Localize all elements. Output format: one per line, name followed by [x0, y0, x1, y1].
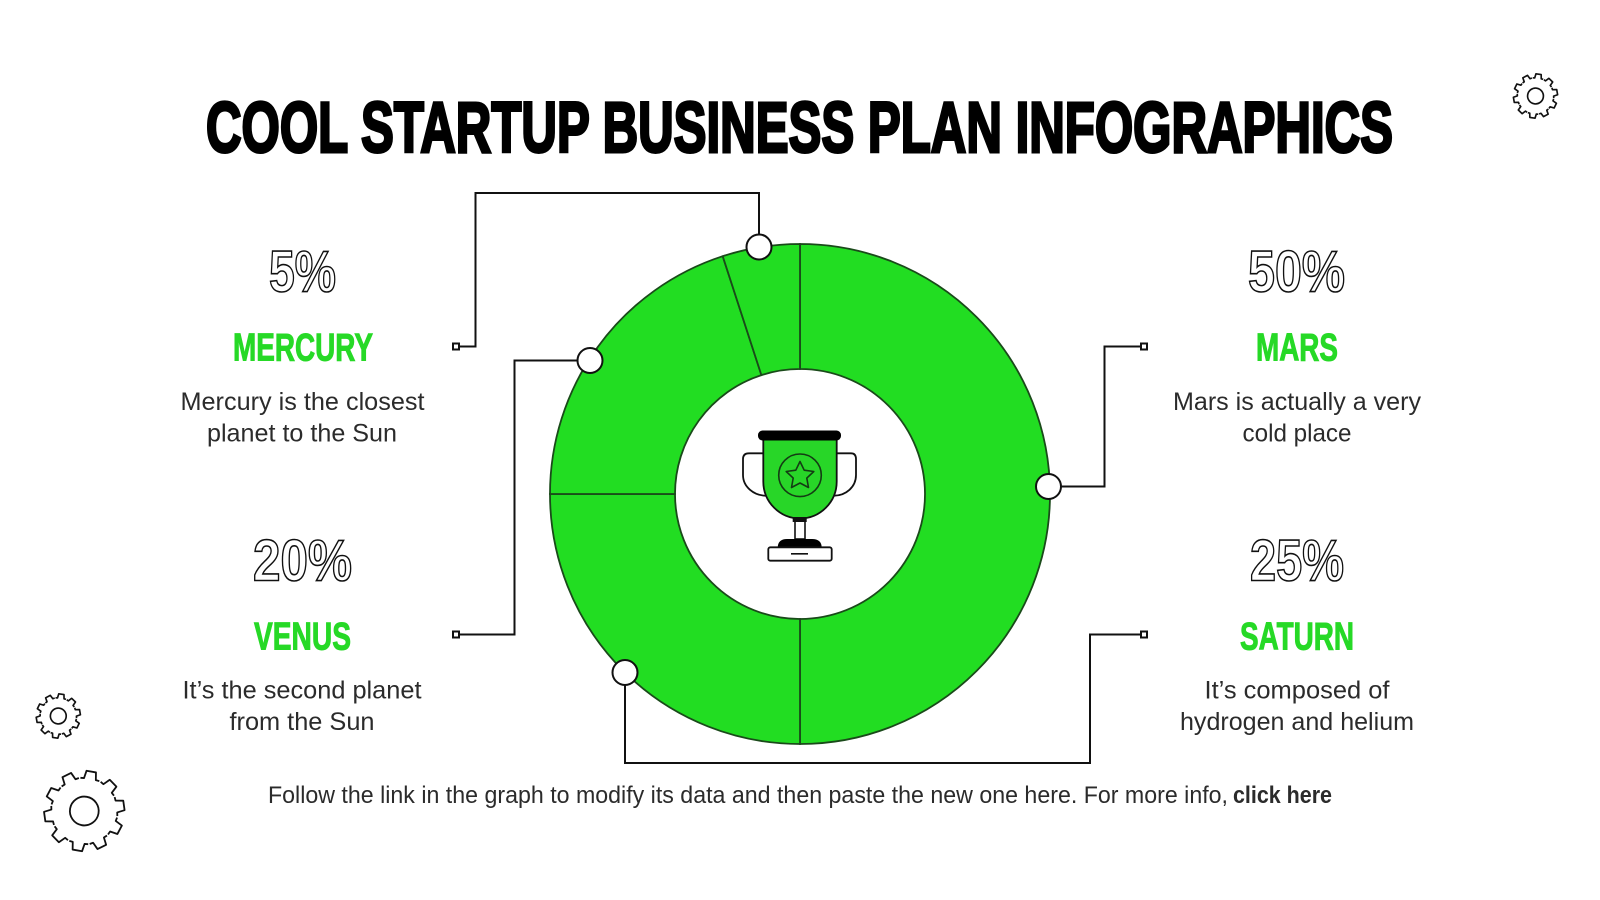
block: Venus: It’s the second planet: [182, 676, 422, 704]
block: Mercury: MERCURY: [233, 326, 373, 370]
footnote: click here: [1233, 782, 1332, 809]
segment: Venus: [550, 256, 761, 494]
connector: Mercury: [453, 193, 772, 350]
block: Venus: VENUS: [254, 616, 351, 658]
icon: large gear bottom left: [37, 764, 132, 858]
block: Mars: cold place: [1242, 420, 1352, 448]
footnote: Follow the link in the graph to modify its data and then paste the new one here. For more info,: [268, 782, 1228, 809]
block: Mars: Mars is actually a very: [1173, 388, 1421, 416]
icon: small gear bottom left: [33, 691, 84, 741]
block: Venus: 20%: [253, 528, 352, 594]
connector: Mars: [1036, 344, 1147, 499]
block: Mercury: planet to the Sun: [207, 420, 397, 448]
block: Mars: 50%: [1248, 240, 1345, 304]
block: Mars: [1173, 240, 1421, 448]
block: Mercury: [180, 240, 425, 448]
block: Venus: from the Sun: [230, 708, 374, 736]
segment: Mars: [800, 244, 1050, 744]
segment: Mercury: [723, 244, 800, 375]
connector: Saturn: [612, 632, 1147, 763]
block: Venus: [182, 528, 422, 736]
block: Saturn: SATURN: [1240, 616, 1354, 658]
block: Mars: MARS: [1256, 326, 1338, 370]
block: Saturn: It’s composed of: [1204, 676, 1390, 704]
block: Mercury: 5%: [269, 240, 336, 304]
icon: trophy: [743, 430, 856, 561]
donut chart: [550, 244, 1050, 744]
block: Saturn: 25%: [1250, 528, 1344, 594]
block: Mercury: Mercury is the closest: [180, 388, 425, 416]
icon: gear top right: [1510, 71, 1561, 121]
block: Saturn: [1180, 528, 1414, 736]
segment: Saturn: [550, 494, 800, 744]
connector: Venus: [453, 348, 602, 638]
block: Saturn: hydrogen and helium: [1180, 708, 1414, 736]
